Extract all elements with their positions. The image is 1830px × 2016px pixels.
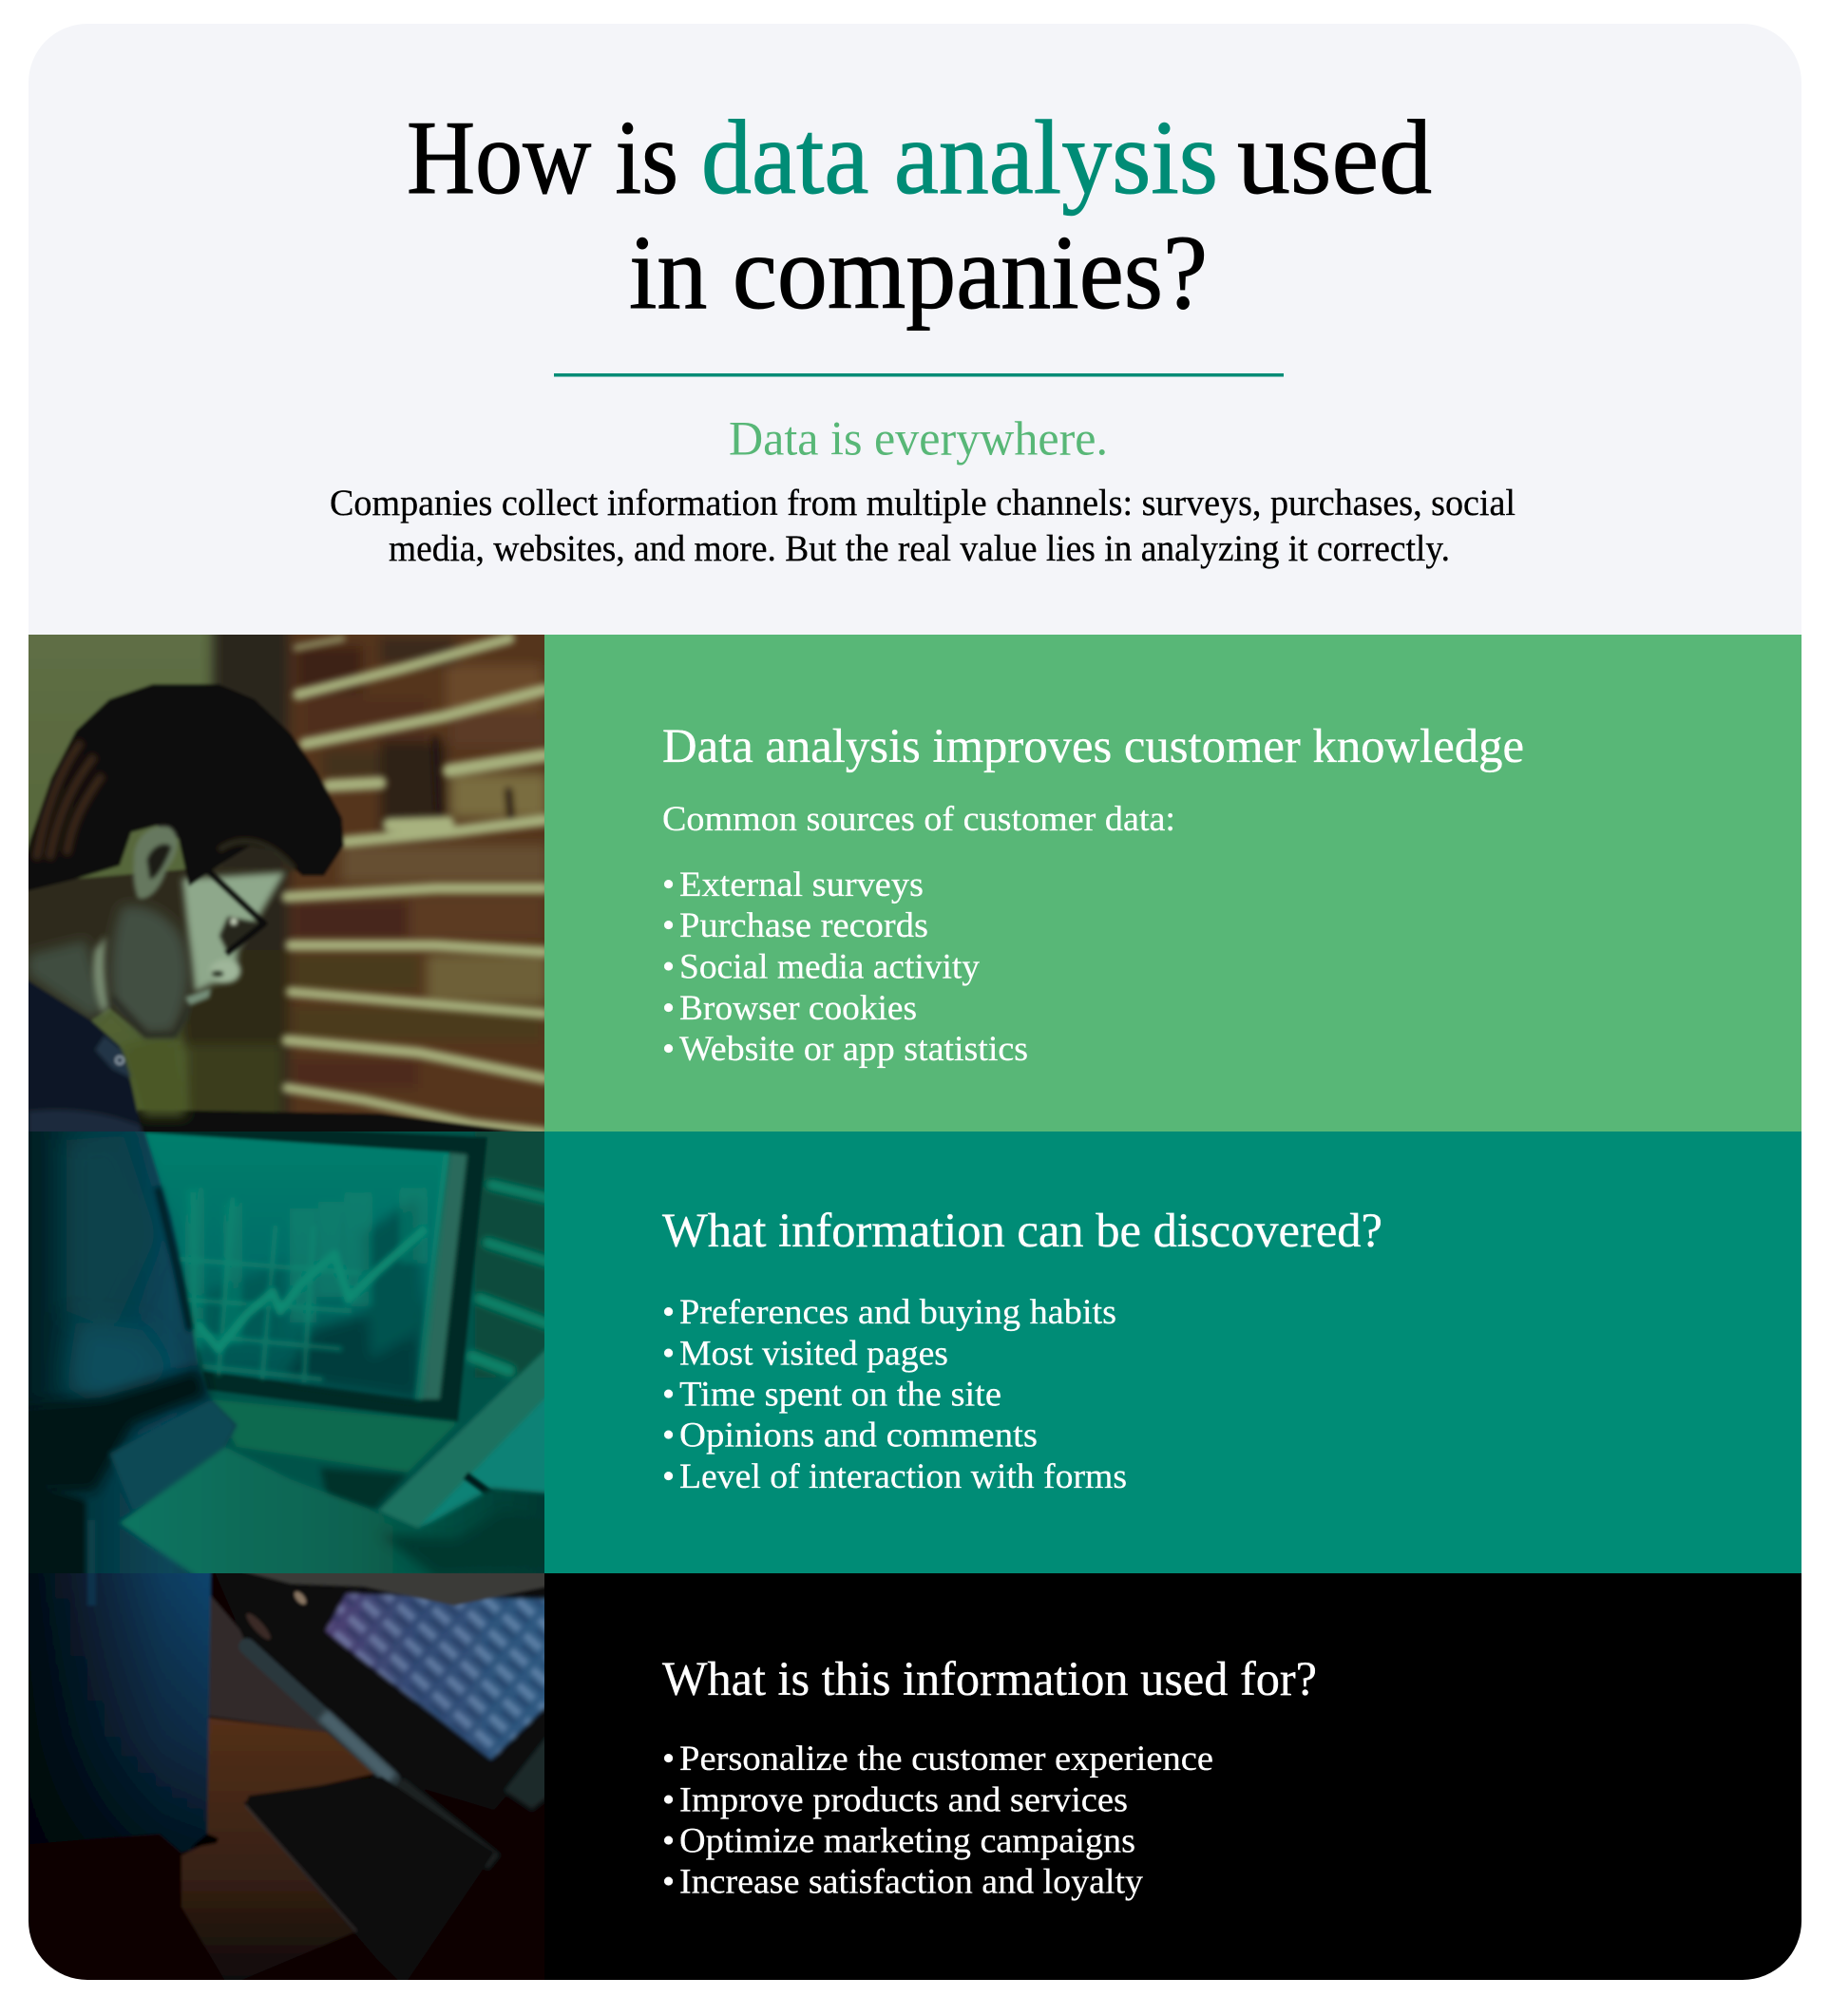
panel: header	[29, 24, 1801, 635]
list: Opinions and comments	[679, 1416, 1038, 1455]
list: Level of interaction with forms	[679, 1457, 1127, 1496]
list: •	[662, 1862, 675, 1902]
title	[407, 100, 1432, 332]
list: Most visited pages	[679, 1334, 948, 1374]
list: •	[662, 906, 675, 945]
glasses	[203, 866, 264, 954]
list: Improve products and services	[679, 1780, 1128, 1820]
title: How is	[407, 100, 678, 217]
list: •	[662, 865, 675, 904]
title: used	[1237, 100, 1432, 217]
photo: monitor and arm section with teal tint	[19, 1121, 556, 1587]
heading: What is this information used for?	[662, 1653, 1317, 1706]
list: •	[662, 1780, 675, 1820]
arm edge	[242, 1573, 544, 1607]
panel: what it is used for	[544, 1573, 1801, 1980]
arm	[120, 1446, 544, 1573]
intro text: media, websites, and more. But the real value lies in analyzing it correctly.	[389, 527, 1450, 569]
list: •	[662, 1376, 675, 1414]
ear	[133, 826, 178, 899]
shirt hem	[19, 1563, 219, 1853]
list: •	[662, 1457, 675, 1496]
list	[662, 1740, 1213, 1902]
list: •	[662, 1822, 675, 1860]
list: •	[662, 1334, 675, 1374]
monitor screen chart	[143, 1132, 449, 1399]
list: Increase satisfaction and loyalty	[679, 1862, 1143, 1902]
list: Browser cookies	[679, 989, 917, 1028]
list: Social media activity	[679, 948, 980, 986]
title: data analysis	[701, 100, 1218, 217]
list: External surveys	[679, 865, 924, 904]
floor	[181, 1718, 374, 1986]
tablet body	[213, 1568, 556, 1862]
dark slab on floor	[245, 1777, 494, 1986]
list: Optimize marketing campaigns	[679, 1822, 1135, 1860]
intro text	[330, 482, 1515, 569]
list: •	[662, 948, 675, 986]
back wall	[207, 1591, 327, 1732]
list: •	[662, 1293, 675, 1332]
monitor body	[142, 1121, 487, 1473]
hair	[19, 684, 344, 893]
shirt collar	[29, 979, 144, 1132]
list: •	[662, 989, 675, 1028]
panel: what can be discovered	[544, 1132, 1801, 1573]
intro line: Common sources of customer data:	[662, 800, 1175, 839]
neck and face	[19, 866, 291, 1037]
list: Personalize the customer experience	[679, 1740, 1213, 1778]
intro text: Companies collect information from multiple channels: surveys, purchases, social	[330, 482, 1515, 523]
list	[662, 865, 1028, 1069]
shirt sleeve	[19, 1121, 237, 1587]
photo: analyst at monitor, brick wall section	[29, 635, 544, 1132]
panel: customer knowledge	[544, 635, 1801, 1132]
list: Time spent on the site	[679, 1376, 1001, 1414]
heading: Data analysis improves customer knowledge	[662, 720, 1524, 773]
brick mortar lines	[287, 638, 544, 1132]
heading: What information can be discovered?	[662, 1205, 1382, 1258]
list	[662, 1293, 1127, 1496]
list: •	[662, 1416, 675, 1455]
list: Preferences and buying habits	[679, 1293, 1116, 1332]
list: •	[662, 1740, 675, 1778]
tablet	[320, 1340, 556, 1530]
list: Website or app statistics	[679, 1030, 1028, 1069]
list: •	[662, 1030, 675, 1069]
title: in companies?	[629, 215, 1208, 332]
list: Purchase records	[679, 906, 928, 945]
teal bricks	[472, 1121, 556, 1378]
photo: tablet and floor section darkened	[19, 1563, 556, 1990]
subtitle: Data is everywhere.	[729, 412, 1108, 466]
